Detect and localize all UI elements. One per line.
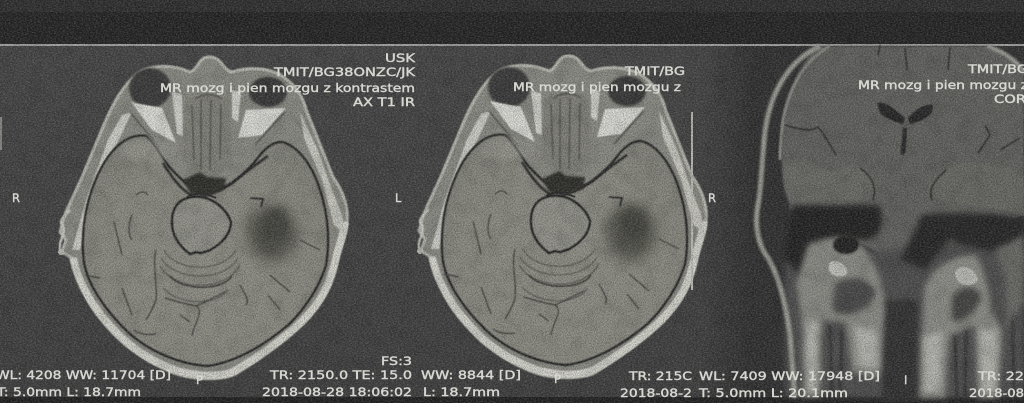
orientation labels: L <box>395 191 402 205</box>
panel: coronal scan 3 <box>750 45 1024 400</box>
lower right bright structures <box>920 255 1002 398</box>
text overlay: scan 3 footer: 2018-08 <box>969 386 1024 400</box>
text overlay: scan 2 footer: TR: 215C <box>628 369 692 383</box>
text overlay: scan 2 header: TMIT/BG <box>624 64 685 78</box>
dark lower bands <box>785 205 882 275</box>
text overlay: scan 2 header: MR mozg i pien mozgu z <box>513 80 681 94</box>
orientation labels <box>12 191 907 387</box>
left edge tick <box>0 117 2 150</box>
text overlay: scan 1 footer <box>0 354 412 399</box>
panel: axial scan 2 <box>417 56 706 378</box>
text overlay: scan 3 header <box>858 62 1024 106</box>
text overlay: scan 1 footer: T: 5.0mm L: 18.7mm <box>0 385 141 399</box>
text overlay: scan 2 footer: WW: 8844 [D] <box>421 368 521 382</box>
orientation labels: R <box>708 191 716 205</box>
text overlay: scan 2 header <box>513 64 685 94</box>
text overlay: scan 1 header: MR mozg i pien mozgu z kontrastem <box>160 81 415 95</box>
darker film area left of coronal scan <box>700 46 760 397</box>
text overlay: scan 1 header <box>160 51 416 109</box>
text overlay: scan 2 footer: 2018-08-2 <box>620 386 692 400</box>
marker: vertical scale line on scan 2 <box>691 112 693 290</box>
panel: axial scan 1 <box>58 57 347 379</box>
orientation labels: I <box>904 373 907 387</box>
text overlay: scan 3 footer: T: 5.0mm L: 20.1mm <box>698 386 848 400</box>
text overlay: scan 2 footer: L: 18.7mm <box>423 385 500 399</box>
text overlay: scan 1 header: USK <box>385 51 416 65</box>
top dark band <box>0 0 1024 46</box>
text overlay: scan 3 header: MR mozg i pien mozgu z <box>858 78 1024 92</box>
text overlay: scan 3 header: TMIT/BG <box>967 62 1024 76</box>
text overlay: scan 1 header: AX T1 IR <box>353 95 415 109</box>
text overlay: scan 3 header: COR <box>994 92 1024 106</box>
bottom dark edge <box>0 397 1024 403</box>
text overlay: scan 1 footer: FS:3 <box>381 354 412 368</box>
text overlay: scan 3 footer <box>698 369 1024 400</box>
text overlay: scan 1 footer: WL: 4208 WW: 11704 [D] <box>0 368 171 382</box>
text overlay: scan 3 footer: TR: 22 <box>977 369 1024 383</box>
orientation labels: P <box>196 373 203 387</box>
text overlay: scan 1 header: TMIT/BG38ONZC/JK <box>273 65 416 79</box>
orientation labels: P <box>554 372 561 386</box>
text overlay: scan 2 footer <box>421 368 692 400</box>
orientation labels: R <box>12 191 20 205</box>
lower left bright structures <box>796 238 885 398</box>
text overlay: scan 1 footer: 2018-08-28 18:06:02 <box>262 385 412 399</box>
ventricles <box>877 102 933 124</box>
text overlay: scan 3 footer: WL: 7409 WW: 17948 [D] <box>699 369 880 383</box>
text overlay: scan 1 footer: TR: 2150.0 TE: 15.0 <box>269 368 412 382</box>
